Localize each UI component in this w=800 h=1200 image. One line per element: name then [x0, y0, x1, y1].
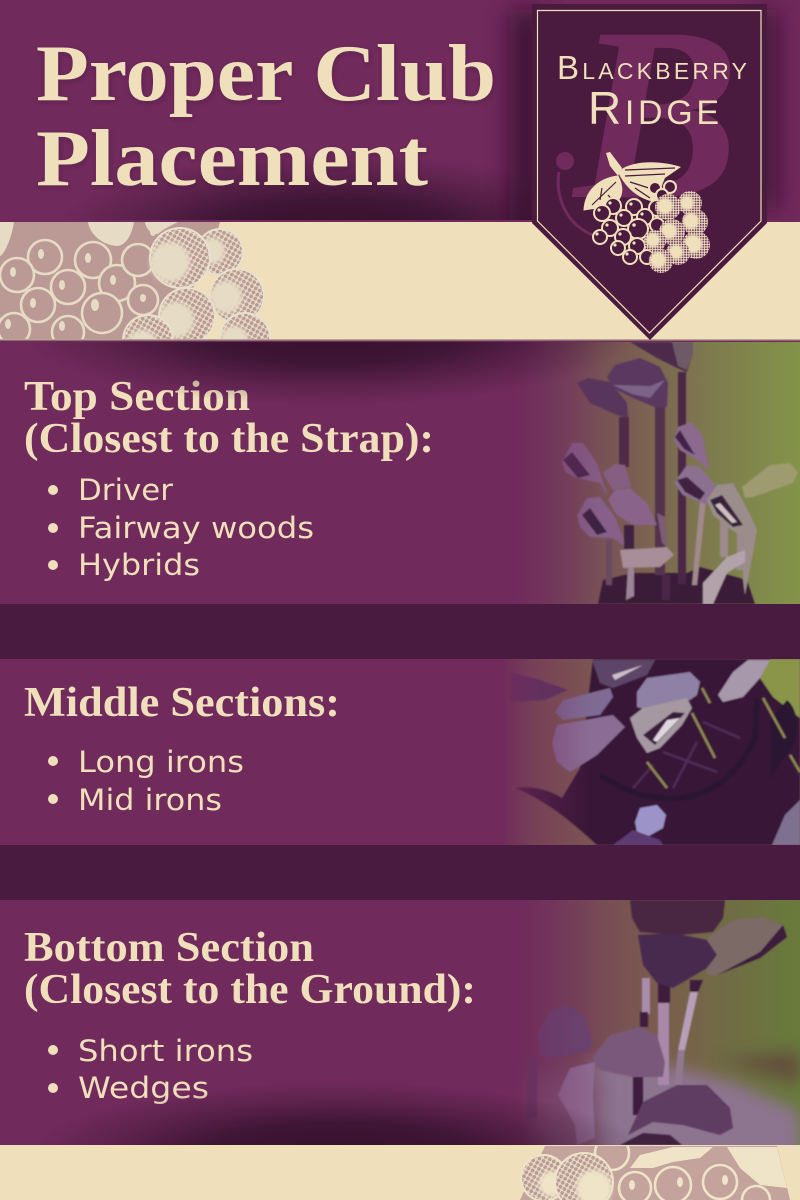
divider band 1: [0, 604, 800, 659]
bottom cream band with berry watermark: [0, 1145, 800, 1200]
heading: middle sections: Middle Sections:: [24, 680, 340, 726]
watermark: berries: [520, 1146, 790, 1200]
brand name: BLACKBERRY: [557, 49, 747, 86]
shield inner outline: [538, 10, 761, 333]
list: middle section clubs: Long irons: [78, 745, 244, 779]
photo: clubs in bag, middle section: [500, 659, 800, 845]
section 3 panel: bottom section: [24, 900, 800, 1145]
list: middle section clubs: Mid irons: [78, 783, 222, 817]
divider band 2: [0, 845, 800, 900]
watermark: berries: [0, 222, 271, 339]
list: top section clubs: [48, 473, 314, 582]
photo: clubs in bag, top section: [540, 342, 800, 604]
header panel: [88, 0, 789, 220]
title: Placement: [36, 115, 428, 203]
list: top section clubs: Fairway woods: [78, 511, 314, 545]
section 2 panel: middle sections: [0, 659, 800, 845]
photo: clubs close-up, bottom section: [530, 900, 800, 1145]
title: Proper Club: [36, 30, 496, 118]
list: bottom section clubs: [48, 1034, 253, 1105]
heading: top section: (Closest to the Strap):: [24, 416, 434, 462]
section 1 panel: top section: [24, 342, 800, 604]
cream band with berry watermark: [0, 222, 800, 340]
heading: bottom section: (Closest to the Ground):: [24, 967, 476, 1013]
title: [36, 30, 496, 203]
heading: bottom section: Bottom Section: [24, 925, 314, 971]
brand name: [557, 49, 747, 134]
list: bottom section clubs: Short irons: [78, 1034, 253, 1068]
shadow: [58, 342, 606, 400]
list: top section clubs: Hybrids: [78, 548, 200, 582]
logo: Blackberry Ridge pennant: [532, 0, 767, 340]
list: middle section clubs: [48, 745, 244, 817]
heading: bottom section: [24, 925, 476, 1013]
shadow: [68, 1090, 622, 1145]
list: bottom section clubs: Wedges: [78, 1071, 209, 1105]
brand name: RIDGE: [588, 82, 719, 134]
heading: top section: [24, 374, 434, 462]
icon: blackberry illustration: [584, 152, 710, 273]
heading: top section: Top Section: [24, 374, 250, 420]
shield shape: [532, 4, 767, 340]
list: top section clubs: Driver: [78, 473, 173, 507]
